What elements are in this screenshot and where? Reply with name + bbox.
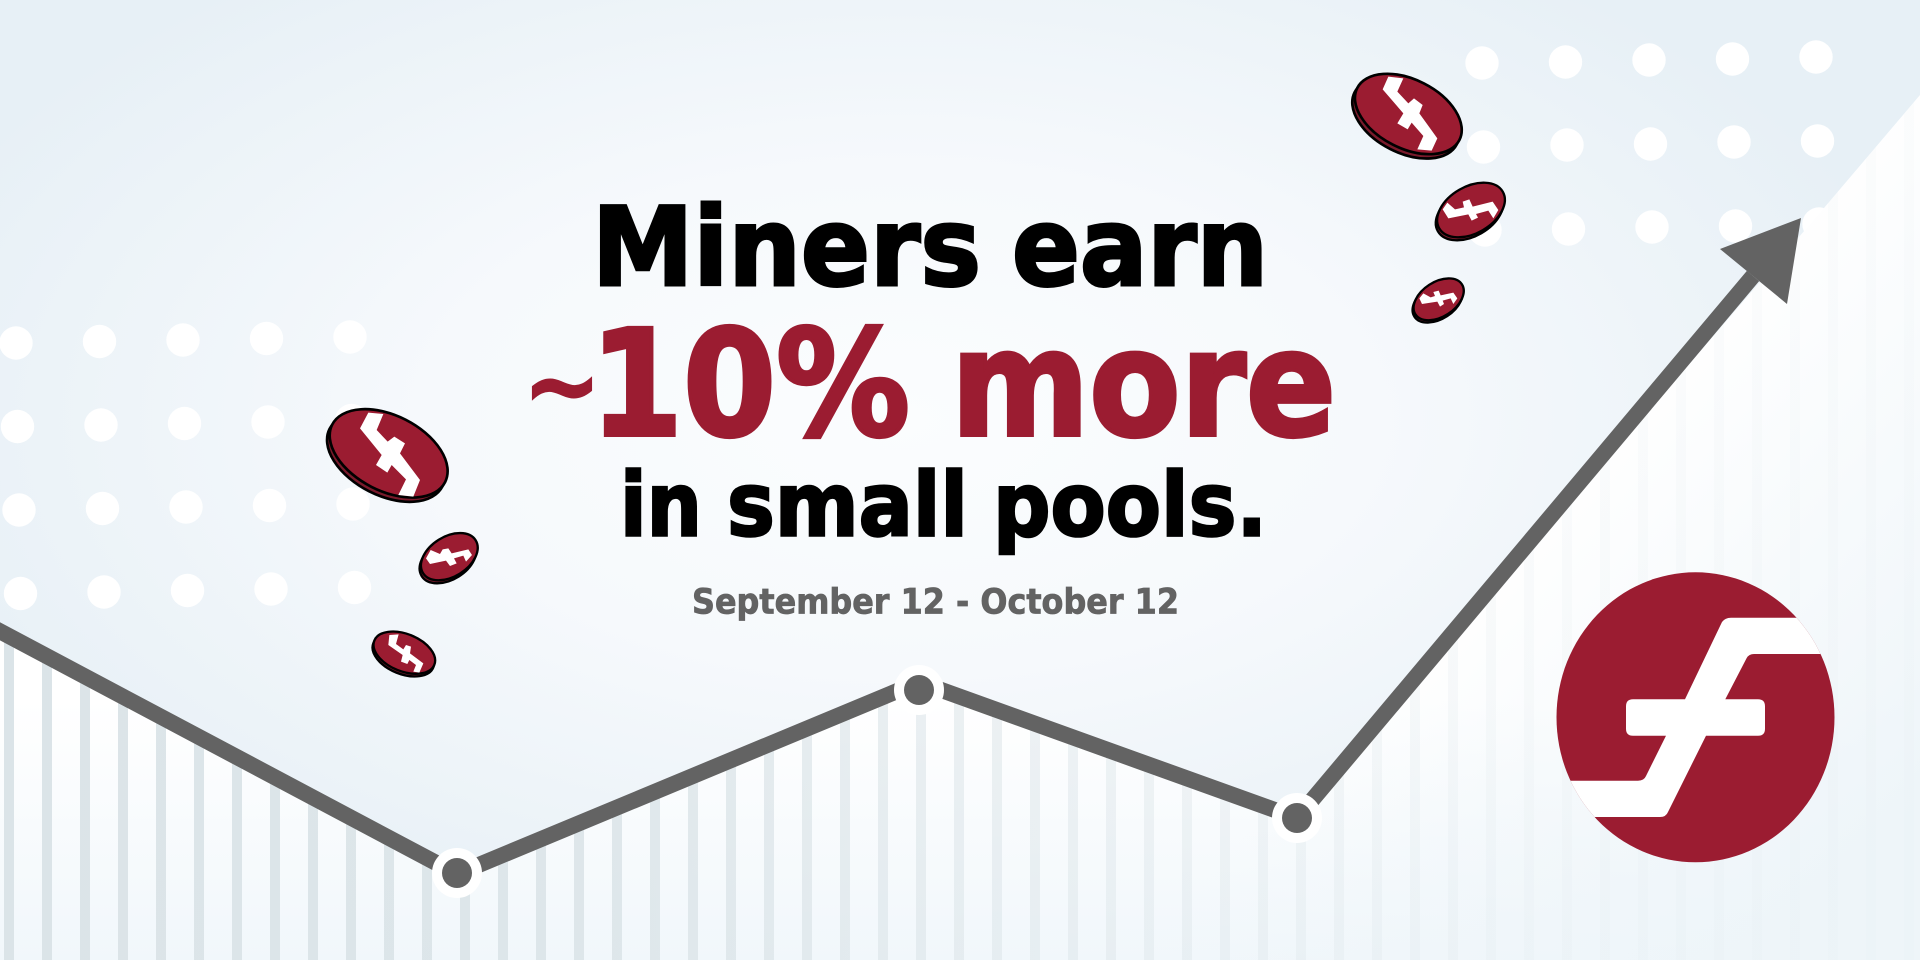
headline (523, 184, 1336, 557)
headline line 3: pools. (993, 454, 1267, 557)
headline line 2: highlighted figure: more (951, 299, 1336, 470)
icon: coin small left (371, 630, 436, 678)
dot grid: left (0, 320, 371, 610)
dot grid: right (1465, 40, 1836, 247)
icon: coin medium left (418, 532, 479, 584)
icon: coin large right (1350, 72, 1464, 160)
headline line 1: Miners (592, 184, 981, 311)
line chart with arrow (0, 218, 1801, 898)
headline line 2: highlighted figure (523, 299, 1336, 470)
icon: coin small right (1411, 277, 1465, 324)
data point 2 (894, 665, 944, 715)
data point 1 (432, 848, 482, 898)
headline line 2: highlighted figure: ~ (523, 327, 601, 444)
headline line 1 (592, 184, 1268, 311)
trend line (0, 276, 1753, 874)
headline line 3: in (620, 454, 702, 557)
icon: coin medium right (1434, 182, 1506, 242)
headline line 3: small (727, 454, 968, 557)
icon: coin large left (326, 408, 449, 504)
arrowhead (1720, 218, 1801, 304)
headline line 1: earn (1012, 184, 1268, 311)
headline line 3 (620, 454, 1267, 557)
headline line 2: highlighted figure: 10% (590, 299, 910, 470)
data point 3 (1272, 793, 1322, 843)
icon: large Firo logo (1556, 572, 1834, 862)
date range: September 12 - October 12 (692, 583, 1179, 623)
